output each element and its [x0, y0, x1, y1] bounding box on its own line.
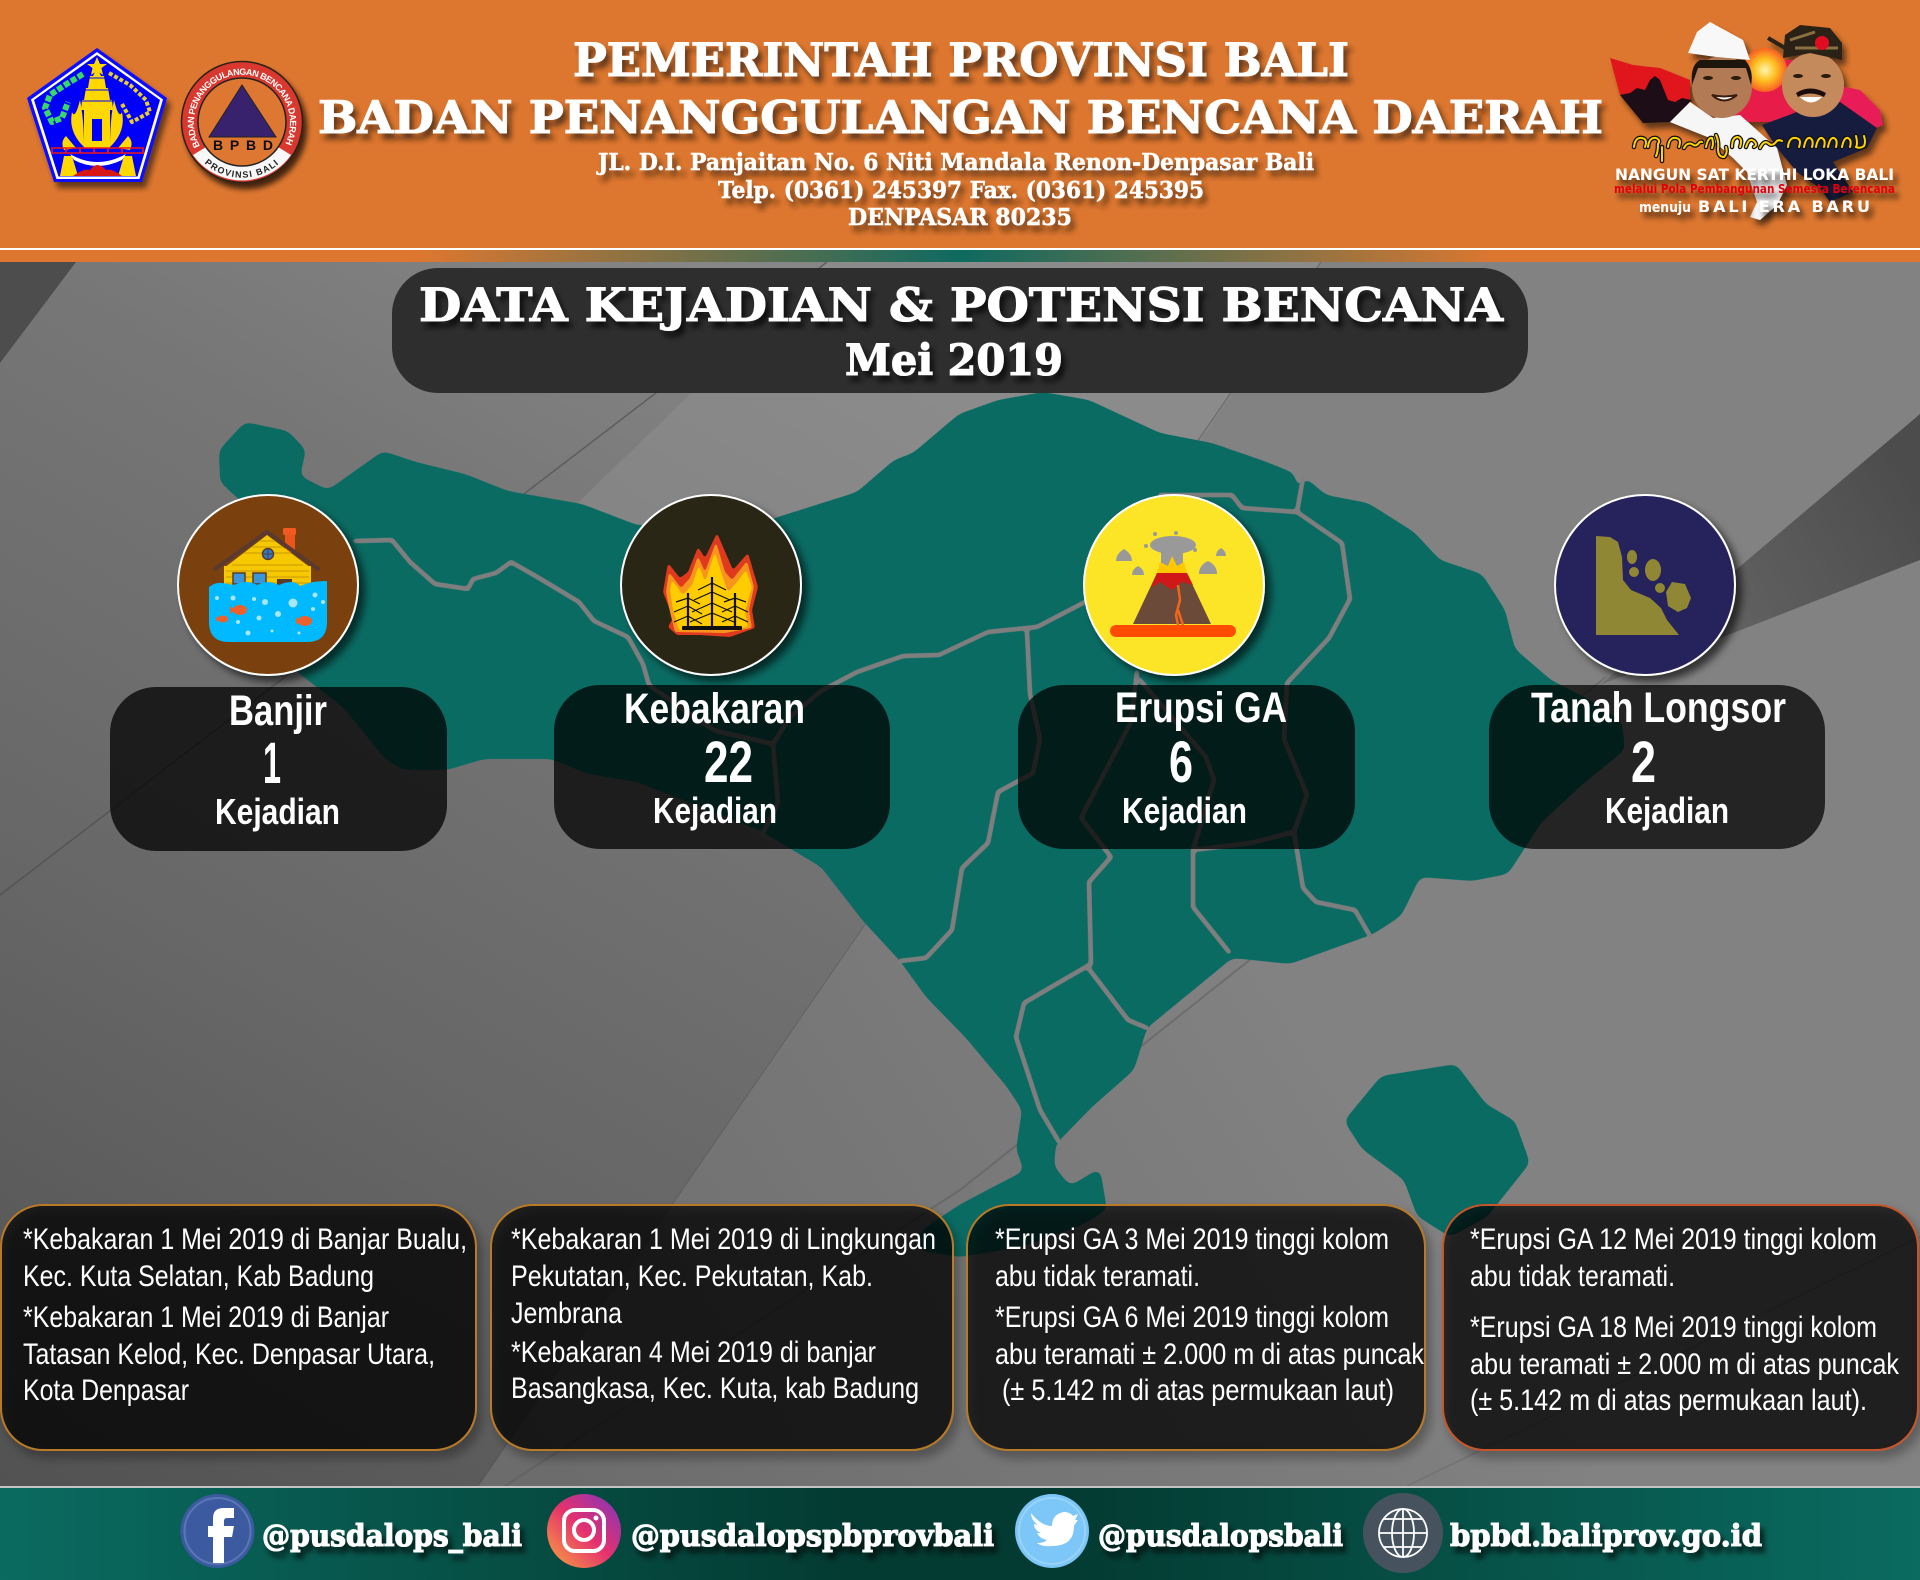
panel: Kebakaran notes right: Pekutatan, Kec. Pekutatan, Kab. [511, 1260, 873, 1293]
footer handle: twitter: @pusdalopsbali [1098, 1519, 1343, 1554]
header text: DENPASAR 80235 [848, 204, 1072, 231]
footer handle: instagram: @pusdalopspbprovbali [631, 1519, 994, 1554]
panel: Erupsi notes left [967, 1205, 1425, 1450]
panel: Kebakaran notes left: Tatasan Kelod, Kec. Denpasar Utara, [23, 1338, 435, 1371]
footer handle: website: bpbd.baliprov.go.id [1450, 1519, 1762, 1554]
panel: Erupsi GA: Erupsi GA [1115, 684, 1287, 732]
background: grey faceted panel [0, 262, 1920, 1486]
panel: Kebakaran notes right: Basangkasa, Kec. Kuta, kab Badung [511, 1372, 919, 1405]
panel: Kebakaran notes right [491, 1205, 953, 1450]
panel: Erupsi GA: 6 [1169, 730, 1193, 795]
header text: JL. D.I. Panjaitan No. 6 Niti Mandala Renon-Denpasar Bali [596, 149, 1314, 176]
panel: Erupsi notes right [1443, 1205, 1918, 1450]
map of Bali [219, 392, 1625, 1257]
panel: Tanah Longsor [1489, 684, 1825, 849]
title panel [392, 268, 1528, 393]
logo: Nangun Sat Kerthi Loka Bali portrait emblem [1610, 22, 1883, 220]
panel: Erupsi notes right: abu tidak teramati. [1470, 1260, 1675, 1293]
emblem slogan text: NANGUN SAT KERTHI LOKA BALI [1615, 165, 1894, 184]
logo: BPBD Provinsi Bali: BADAN PENANGGULANGAN BENCANA DAERAH [188, 68, 296, 148]
icon: globe [1363, 1493, 1443, 1573]
panel: Tanah Longsor: 2 [1631, 730, 1656, 795]
panel: Kebakaran notes left: *Kebakaran 1 Mei 2019 di Banjar Bualu, [23, 1223, 467, 1256]
emblem slogan text: BALI ERA BARU [1698, 197, 1870, 216]
panel: Erupsi notes left: *Erupsi GA 6 Mei 2019 tinggi kolom [995, 1301, 1389, 1334]
panel: Tanah Longsor: Tanah Longsor [1531, 684, 1786, 732]
header text: BADAN PENANGGULANGAN BENCANA DAERAH [318, 91, 1603, 144]
icon: instagram [547, 1494, 621, 1568]
header text: PEMERINTAH PROVINSI BALI [573, 33, 1349, 87]
panel: Kebakaran: Kejadian [653, 790, 777, 831]
title text [419, 278, 1504, 386]
footer bar [0, 1486, 1920, 1580]
map: Nusa Penida island [1344, 1064, 1530, 1237]
panel: Kebakaran: 22 [704, 730, 753, 795]
emblem slogan text: menuju [1639, 200, 1691, 216]
panel: Kebakaran notes right: *Kebakaran 4 Mei 2019 di banjar [511, 1336, 876, 1369]
icon: twitter [1015, 1494, 1089, 1568]
panel: Kebakaran notes left [1, 1205, 476, 1450]
icon: volcano [1084, 495, 1264, 675]
icon: facebook [180, 1494, 254, 1568]
panel: Kebakaran notes right: *Kebakaran 1 Mei 2019 di Lingkungan [511, 1223, 936, 1256]
panel: Erupsi notes left: abu teramati ± 2.000 m di atas puncak [995, 1338, 1425, 1371]
logo: BPBD Provinsi Bali: BPBD [213, 137, 273, 153]
map: regency boundaries [355, 478, 1370, 1142]
panel: Kebakaran notes left: Kec. Kuta Selatan, Kab Badung [23, 1260, 374, 1293]
panel: Banjir [110, 687, 447, 851]
panel: Kebakaran notes left: Kota Denpasar [23, 1374, 189, 1407]
header text [318, 33, 1603, 231]
panel: Banjir: Banjir [229, 687, 327, 735]
panel: Banjir: Kejadian [215, 791, 340, 832]
title text: DATA KEJADIAN & POTENSI BENCANA [419, 278, 1504, 332]
logo: Provinsi Bali shield [27, 48, 167, 182]
icon: forest fire [621, 495, 801, 675]
panel: Tanah Longsor: Kejadian [1605, 790, 1729, 831]
panel: Kebakaran notes right: Jembrana [511, 1297, 622, 1330]
panel: Kebakaran notes left: *Kebakaran 1 Mei 2019 di Banjar [23, 1301, 389, 1334]
emblem script band [1634, 135, 1865, 161]
header text: Telp. (0361) 245397 Fax. (0361) 245395 [718, 177, 1204, 204]
panel: Kebakaran: Kebakaran [624, 685, 805, 733]
header bar [0, 0, 1920, 262]
panel: Erupsi GA [1018, 684, 1355, 849]
emblem slogan text [1614, 165, 1895, 216]
title text: Mei 2019 [845, 336, 1063, 386]
panel: Erupsi notes left: (± 5.142 m di atas permukaan laut) [1002, 1374, 1394, 1407]
logo: BPBD Provinsi Bali [180, 60, 312, 194]
footer handle: facebook: @pusdalops_bali [262, 1519, 522, 1554]
logo: BPBD Provinsi Bali: PROVINSI BALI [204, 158, 278, 178]
panel: Banjir: 1 [263, 731, 281, 796]
icon: flood house [178, 495, 358, 675]
icon: landslide [1555, 495, 1735, 675]
panel: Erupsi notes left: *Erupsi GA 3 Mei 2019 tinggi kolom [995, 1223, 1389, 1256]
panel: Erupsi notes left: abu tidak teramati. [995, 1260, 1200, 1293]
panel: Erupsi GA: Kejadian [1122, 790, 1247, 831]
panel: Kebakaran [554, 685, 890, 849]
